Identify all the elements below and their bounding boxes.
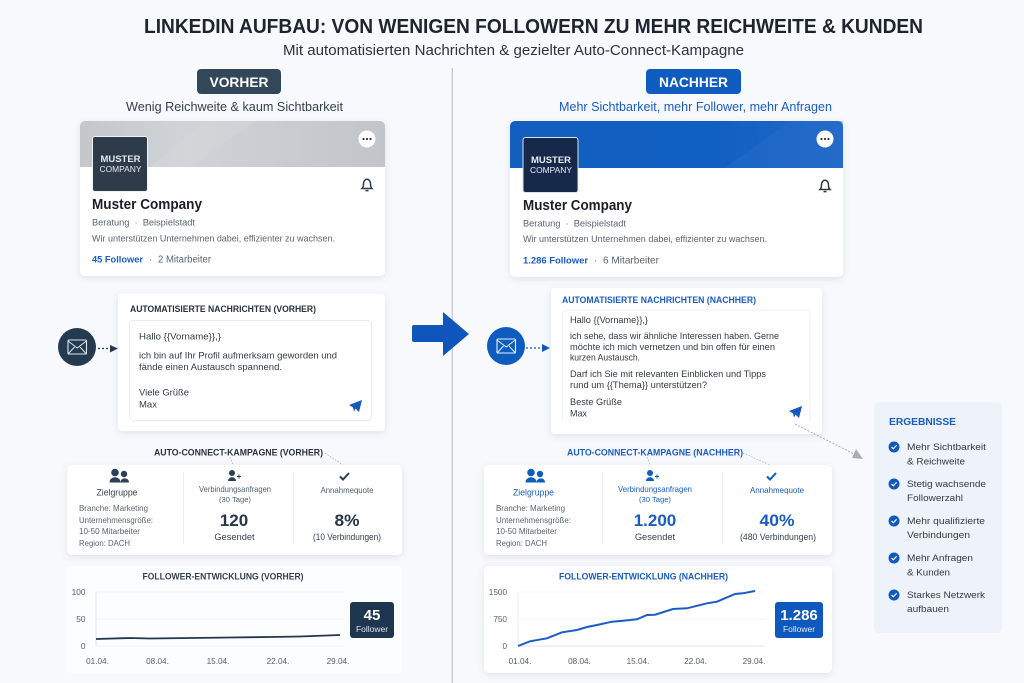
line chart: 29.04. — [743, 657, 765, 666]
stat: acceptance — [740, 485, 816, 542]
panel: campaign nachher — [484, 465, 832, 555]
logo — [523, 138, 578, 192]
icon: check — [767, 473, 776, 480]
panel: campaign vorher — [67, 465, 402, 555]
stat: acceptance: Annahmequote — [320, 485, 374, 495]
line chart — [489, 588, 765, 666]
message text: Hallo {{Vorname}},} — [139, 332, 221, 342]
follower count: · — [149, 254, 152, 266]
line chart: 01.04. — [86, 657, 109, 666]
arrow: vorher to nachher — [412, 312, 469, 356]
line chart: 01.04. — [509, 657, 531, 666]
badge: 45 follower: 45 — [364, 607, 380, 624]
badge: 1.286 follower: 1.286 — [780, 607, 818, 624]
company name: Muster Company — [92, 197, 202, 213]
message text: Hallo {{Vorname}},} — [570, 315, 648, 325]
icon: add person — [228, 470, 241, 481]
target group: Branche: Marketing — [79, 503, 148, 513]
stat: acceptance: 8% — [334, 511, 360, 530]
target group: Unternehmensgröße: — [79, 515, 153, 525]
target group — [496, 488, 571, 548]
target group: Region: DACH — [496, 538, 547, 548]
subtitle: Mit automatisierten Nachrichten & gezielter Auto-Connect-Kampagne — [283, 43, 744, 59]
badge: 1.286 follower — [775, 602, 823, 638]
logo: MUSTER — [531, 155, 571, 166]
target group: Branche: Marketing — [496, 503, 565, 513]
logo: COMPANY — [100, 164, 142, 174]
heading: AUTOMATISIERTE NACHRICHTEN (NACHHER) — [562, 295, 756, 305]
message text: Darf ich Sie mit relevanten Einblicken und Tipps — [570, 369, 766, 379]
stat: requests — [199, 484, 271, 542]
arrow: message to results — [795, 424, 863, 459]
result item — [888, 552, 973, 578]
target group — [79, 488, 153, 548]
panel: nachher column — [484, 69, 863, 673]
stat: requests — [618, 484, 692, 542]
icon: add person — [646, 470, 659, 481]
icon: menu dots — [358, 130, 376, 148]
stat: acceptance: (10 Verbindungen) — [313, 532, 381, 542]
logo: COMPANY — [530, 165, 572, 175]
icon: send — [349, 400, 362, 412]
target group: Region: DACH — [79, 538, 130, 548]
company description: Wir unterstützen Unternehmen dabei, effizienter zu wachsen. — [92, 234, 335, 244]
icon: envelope nachher — [487, 327, 525, 365]
message text: kurzen Austausch. — [570, 352, 640, 362]
heading: FOLLOWER-ENTWICKLUNG (VORHER) — [142, 572, 304, 582]
stat: requests: (30 Tage) — [219, 495, 251, 504]
line chart: 22.04. — [684, 657, 707, 666]
heading: auto-connect nachher: AUTO-CONNECT-KAMPAGNE (NACHHER) — [567, 448, 743, 458]
message text: ich sehe, dass wir ähnliche Interessen haben. Gerne — [570, 331, 779, 341]
result item: Mehr Sichtbarkeit — [907, 442, 986, 453]
badge: 45 follower — [350, 602, 394, 638]
result item: Stetig wachsende — [907, 479, 986, 490]
result item: aufbauen — [907, 604, 949, 615]
company meta: Beratung · Beispielstadt — [92, 218, 195, 228]
stat: requests: Verbindungsanfragen — [199, 484, 271, 494]
panel: messages vorher — [118, 294, 385, 431]
line chart: 22.04. — [267, 657, 289, 666]
result item: Mehr Anfragen — [907, 553, 973, 564]
panel: messages nachher — [551, 288, 822, 434]
stat: requests: Verbindungsanfragen — [618, 484, 692, 494]
line chart: 08.04. — [146, 657, 169, 666]
line chart: 100 — [72, 587, 86, 597]
message text: Beste Grüße — [570, 397, 622, 407]
stat: requests: 1.200 — [634, 511, 676, 530]
follower count — [523, 256, 660, 266]
panel: follower chart nachher — [484, 566, 832, 673]
title: LINKEDIN AUFBAU: VON WENIGEN FOLLOWERN ZU MEHR REICHWEITE & KUNDEN — [144, 15, 923, 38]
icon: group — [526, 469, 545, 482]
message text: fände einen Austausch spannend. — [139, 362, 282, 372]
target group: 10-50 Mitarbeiter — [496, 526, 557, 536]
message text: Viele Grüße — [139, 388, 189, 398]
stat: acceptance: Annahmequote — [750, 485, 804, 495]
message text: Max — [139, 400, 157, 410]
badge: 1.286 follower: Follower — [783, 624, 815, 634]
result item: Followerzahl — [907, 493, 963, 504]
follower count: 45 Follower — [92, 254, 143, 266]
arrow: envelope to message — [98, 345, 118, 352]
subheading: vorher: Wenig Reichweite & kaum Sichtbarkeit — [126, 100, 344, 114]
result item — [888, 590, 985, 615]
icon: check — [340, 473, 349, 480]
badge: vorher: VORHER — [210, 74, 268, 90]
badge: vorher — [197, 69, 281, 94]
follower count: 1.286 Follower — [523, 256, 588, 266]
result item: Verbindungen — [907, 530, 970, 541]
line chart: 0 — [502, 642, 507, 651]
icon: menu dots — [816, 130, 834, 148]
message text: Max — [570, 408, 587, 418]
result item: Starkes Netzwerk — [907, 590, 985, 601]
result item: & Reichweite — [907, 456, 965, 468]
result item — [888, 516, 985, 541]
line chart: 15.04. — [207, 657, 229, 666]
target group: Unternehmensgröße: — [496, 515, 571, 525]
line chart: 0 — [81, 641, 86, 651]
target group: 10-50 Mitarbeiter — [79, 526, 140, 536]
line chart — [72, 587, 349, 666]
line chart: 29.04. — [327, 657, 349, 666]
panel: company card nachher — [510, 121, 843, 277]
arrow: envelope to message — [526, 344, 550, 352]
stat: requests: 120 — [220, 511, 248, 530]
panel: ergebnisse — [874, 402, 1002, 633]
line chart: 50 — [76, 614, 86, 624]
panel: company card vorher — [80, 121, 385, 276]
line chart: 1500 — [489, 588, 507, 597]
heading: ERGEBNISSE — [889, 416, 956, 428]
stat: acceptance: (480 Verbindungen) — [740, 532, 816, 542]
icon: bell — [362, 179, 372, 191]
target group: Zielgruppe — [96, 488, 138, 498]
follower count — [92, 254, 212, 266]
result item: Mehr qualifizierte — [907, 516, 985, 527]
follower count: · — [594, 256, 597, 266]
heading: AUTOMATISIERTE NACHRICHTEN (VORHER) — [130, 304, 316, 314]
stat: requests: Gesendet — [214, 532, 255, 542]
stat: requests: (30 Tage) — [639, 495, 671, 504]
icon: group — [110, 469, 129, 482]
result item — [888, 478, 986, 504]
panel: vorher column — [58, 69, 402, 673]
icon: envelope vorher — [58, 328, 96, 366]
follower count: 6 Mitarbeiter — [603, 256, 660, 266]
message text — [570, 315, 779, 418]
subheading: nachher: Mehr Sichtbarkeit, mehr Follower, mehr Anfragen — [559, 100, 832, 114]
stat: acceptance: 40% — [760, 511, 794, 530]
target group: Zielgruppe — [513, 488, 554, 498]
message text: möchte ich mich vernetzen und bin offen für einen — [570, 342, 775, 352]
follower count: 2 Mitarbeiter — [158, 254, 212, 266]
company name: Muster Company — [523, 198, 632, 214]
line chart: 08.04. — [568, 657, 591, 666]
result item: & Kunden — [907, 568, 950, 578]
badge: nachher — [646, 69, 741, 94]
stat: requests: Gesendet — [635, 532, 676, 542]
logo: MUSTER — [100, 154, 141, 165]
message text — [139, 332, 337, 410]
company meta: Beratung · Beispielstadt — [523, 218, 626, 228]
line chart: 15.04. — [627, 657, 649, 666]
line chart: 750 — [493, 615, 507, 624]
logo — [92, 136, 148, 192]
icon: bell — [820, 180, 830, 192]
stat: acceptance — [313, 485, 381, 542]
icon: send — [789, 406, 802, 418]
badge: 45 follower: Follower — [356, 624, 388, 634]
heading: auto-connect vorher: AUTO-CONNECT-KAMPAGNE (VORHER) — [154, 448, 323, 458]
company description: Wir unterstützen Unternehmen dabei, effizienter zu wachsen. — [523, 234, 767, 244]
heading: FOLLOWER-ENTWICKLUNG (NACHHER) — [559, 572, 728, 582]
badge: nachher: NACHHER — [659, 74, 728, 90]
message text: ich bin auf Ihr Profil aufmerksam geworden und — [139, 350, 337, 360]
result item — [888, 442, 986, 468]
panel: follower chart vorher — [67, 566, 402, 673]
message text: rund um {{Thema}} unterstützen? — [570, 380, 707, 390]
